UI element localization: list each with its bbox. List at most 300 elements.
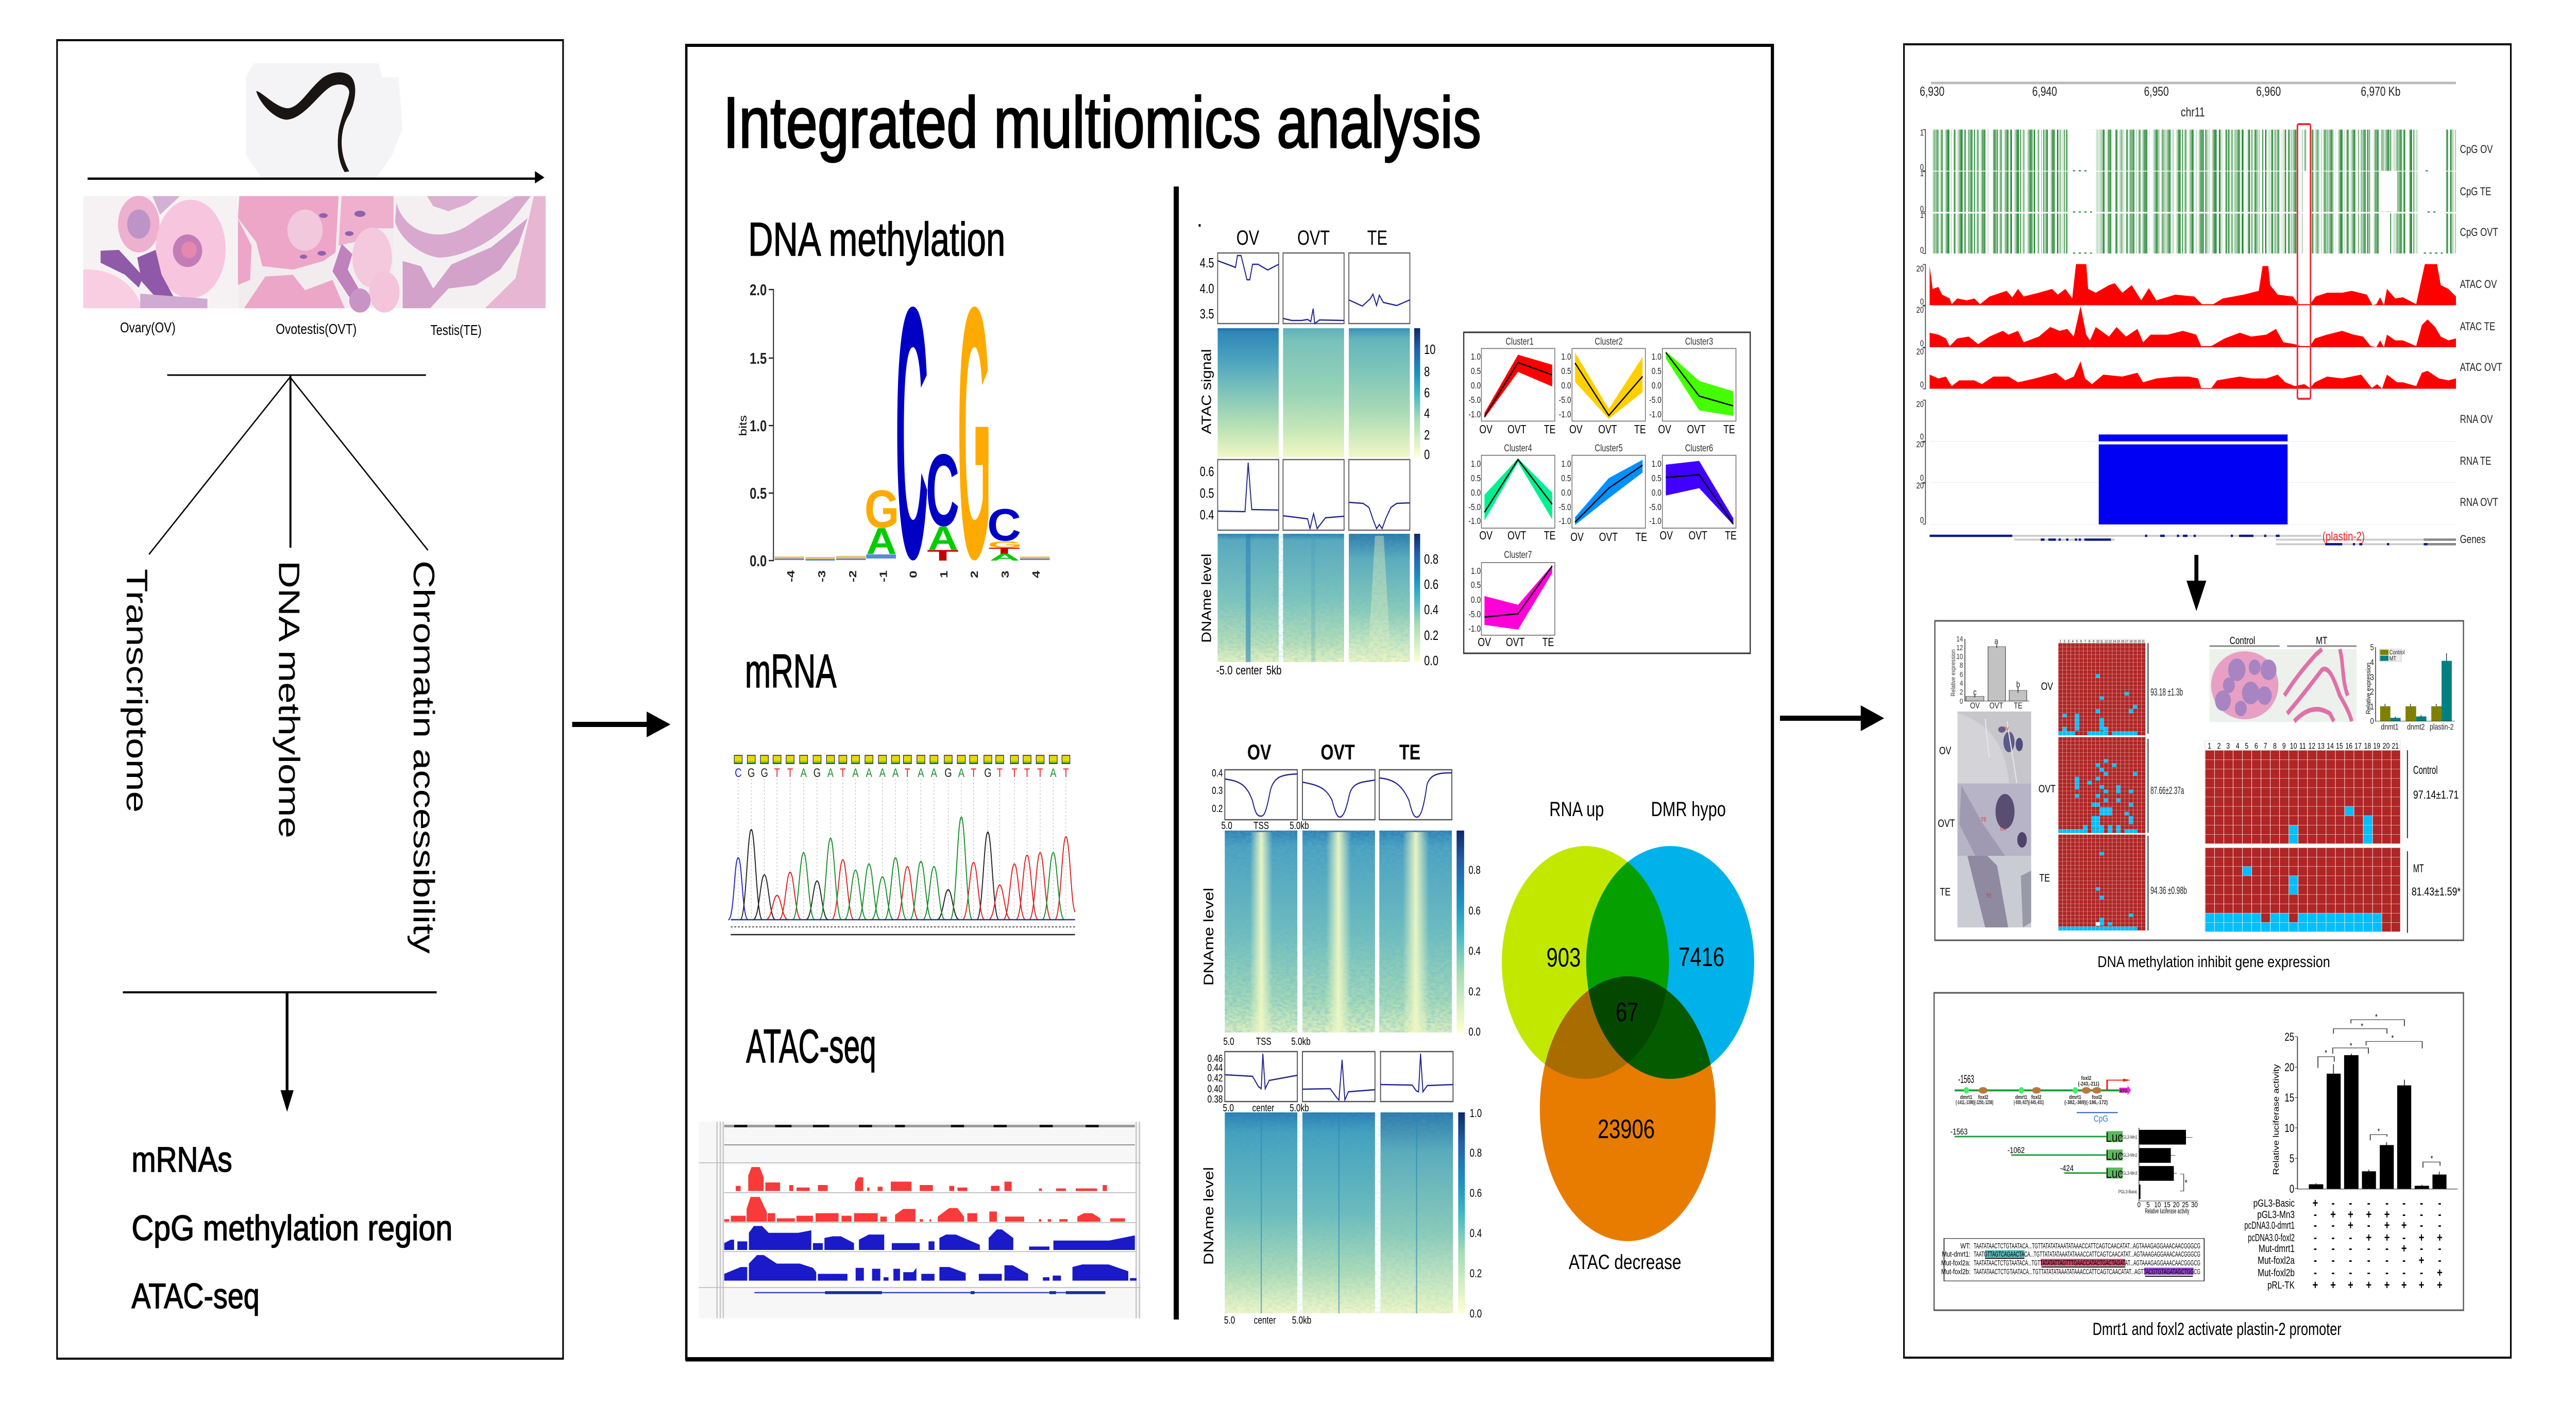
table: plasmid combinations: - xyxy=(2438,1242,2441,1256)
panel: expression clusters: 0.5 xyxy=(1561,366,1571,376)
track labels: ATAC TE xyxy=(2460,320,2495,333)
caption: DNA methylation inhibit gene expression: DNA methylation inhibit gene expression xyxy=(2097,953,2330,971)
panel: expression clusters: 0.0 xyxy=(1471,595,1481,605)
table: plasmid combinations: - xyxy=(2331,1242,2335,1256)
chart: relative luciferase activity bars: * xyxy=(2378,1127,2380,1136)
chart: TSS and center DNAme heatmaps: DNAme level xyxy=(1201,1167,1216,1265)
chart: relative expression bars: 0 xyxy=(1960,697,1963,705)
chart: sequence logo: -2 xyxy=(847,570,858,582)
panel: expression clusters: OV xyxy=(1570,531,1584,544)
chart: TSS and center DNAme heatmaps: 5.0 xyxy=(1223,1036,1234,1047)
block: promoter mutant sequences: Mut-foxl2a: xyxy=(1941,1259,1971,1267)
chart: sequencing chromatogram: A xyxy=(931,766,938,780)
table: plasmid combinations: - xyxy=(2367,1219,2370,1232)
chart: relative expression bars: 12 xyxy=(1956,644,1963,652)
chart: methylation grid control vs MT: 8 xyxy=(2273,742,2277,751)
table: plasmid combinations: + xyxy=(2330,1208,2336,1222)
chart: relative expression bars: 14 xyxy=(1956,635,1963,643)
panel: expression clusters: 0.5 xyxy=(1471,580,1481,590)
chart: TSS and center DNAme heatmaps: 0.46 xyxy=(1208,1053,1223,1064)
diagram: promoter schematic: (-382,-369) xyxy=(2064,1099,2086,1106)
chart: sequencing chromatogram: G xyxy=(984,766,992,780)
table: plasmid combinations: - xyxy=(2438,1219,2441,1232)
chart: bisulfite methylation grid by tissue: 8 xyxy=(2089,639,2090,644)
table: plasmid combinations: - xyxy=(2331,1254,2335,1267)
track labels xyxy=(2460,143,2502,546)
chart: TSS and center DNAme heatmaps: 0.2 xyxy=(1468,986,1481,999)
chart: methylation grid control vs MT: 17 xyxy=(2354,742,2362,751)
chart: TSS and center DNAme heatmaps: 0.40 xyxy=(1208,1083,1223,1094)
chart: genome browser tracks at plastin-2: 20 xyxy=(1917,439,1924,449)
chart: bisulfite methylation grid by tissue: 19 xyxy=(2133,639,2137,644)
chart: bisulfite methylation grid by tissue: 9 xyxy=(2093,639,2094,644)
chart: genome browser tracks at plastin-2: 20 xyxy=(1917,481,1924,490)
table: plasmid combinations: - xyxy=(2314,1254,2317,1267)
panel: integrated multiomics analysis xyxy=(686,44,1773,1361)
chart: gene expression control vs MT: 2 xyxy=(2370,687,2374,697)
chart: TSS and center DNAme heatmaps xyxy=(1201,740,1482,1326)
table: plasmid combinations: - xyxy=(2331,1266,2335,1280)
labels: tissue names: OV xyxy=(2041,680,2053,692)
chart: ATAC and DNAme heatmaps around center xyxy=(1199,226,1438,678)
chart: methylation grid control vs MT: 10 xyxy=(2290,742,2297,751)
panel: expression clusters: -1.0 xyxy=(1649,516,1662,526)
chart: relative luciferase activity bars: * xyxy=(2431,1155,2433,1163)
chart: TSS and center DNAme heatmaps: 5.0 xyxy=(1221,820,1232,831)
chart: genome browser tracks at plastin-2: 0 xyxy=(1920,339,1924,348)
panel: expression clusters: 0.0 xyxy=(1471,380,1481,391)
panel: expression clusters: 1.0 xyxy=(1652,351,1662,362)
chart: genome browser tracks at plastin-2 xyxy=(1917,83,2502,546)
panel: expression clusters: -5.0 xyxy=(1468,502,1481,512)
panel: expression clusters: Cluster1 xyxy=(1505,336,1534,347)
panel: expression clusters: 1.0 xyxy=(1561,351,1571,362)
chart: gene expression control vs MT: MT xyxy=(2389,655,2396,662)
table: plasmid combinations: - xyxy=(2402,1254,2405,1267)
diagram: promoter schematic: dmrt1 xyxy=(1960,1094,1973,1101)
chart: relative luciferase activity bars xyxy=(2244,1013,2458,1292)
chart: ATAC and DNAme heatmaps around center: ATAC signal xyxy=(1199,349,1214,434)
label: plastin-2: (plastin-2) xyxy=(2323,530,2365,544)
panel: expression clusters: OV xyxy=(1569,423,1583,436)
chart: sequencing chromatogram: A xyxy=(866,766,872,780)
panel: expression clusters: 0.0 xyxy=(1471,487,1481,498)
chart: methylation grid control vs MT: 9 xyxy=(2282,742,2286,751)
chart: sequencing chromatogram: C xyxy=(735,766,742,780)
panel: expression clusters: OV xyxy=(1479,529,1493,543)
image: in situ hybridization xyxy=(1957,712,2031,927)
chart: deletion constructs with luciferase activity: * xyxy=(2185,1178,2188,1188)
chart: deletion constructs with luciferase activity: 10 xyxy=(2154,1200,2161,1209)
image: gonad histology strip xyxy=(83,196,546,313)
chart: TSS and center DNAme heatmaps: 0.38 xyxy=(1208,1093,1223,1105)
chart: sequencing chromatogram: A xyxy=(879,766,886,780)
chart: Venn diagram: 7416 xyxy=(1679,942,1724,972)
chart: TSS and center DNAme heatmaps: 0.44 xyxy=(1208,1062,1223,1073)
panel: expression clusters: 0.0 xyxy=(1561,487,1571,498)
chart: ATAC and DNAme heatmaps around center: 0 xyxy=(1424,447,1430,462)
chart: methylation grid control vs MT: Control xyxy=(2413,764,2438,777)
chart: methylation grid control vs MT: 4 xyxy=(2236,742,2240,751)
chart: deletion constructs with luciferase activity: -424 xyxy=(2060,1163,2074,1173)
chart: methylation grid control vs MT: 16 xyxy=(2345,742,2352,751)
chart: sequence logo: 1 xyxy=(938,570,950,578)
chart: TSS and center DNAme heatmaps: center xyxy=(1254,1314,1276,1326)
table: plasmid combinations: - xyxy=(2314,1242,2317,1256)
chart: sequencing chromatogram: G xyxy=(814,766,821,780)
table: plasmid combinations: - xyxy=(2438,1208,2441,1222)
diagram: promoter schematic: (-1411,-1398)(-1250,-1236) xyxy=(1956,1099,1993,1106)
panel: expression clusters: TE xyxy=(1543,636,1554,649)
table: plasmid combinations: + xyxy=(2366,1278,2371,1292)
panel: expression clusters: TE xyxy=(1544,423,1555,436)
image: control vs MT histology: MT xyxy=(2316,635,2327,646)
diagram: promoter schematic: -1563 xyxy=(1958,1073,1974,1086)
image: control vs MT histology xyxy=(2210,635,2357,722)
chart: TSS and center DNAme heatmaps: 5.0 xyxy=(1224,1314,1235,1326)
dot mark xyxy=(1199,224,1200,227)
chart: genome browser tracks at plastin-2: 0 xyxy=(1920,515,1924,525)
labels: tissue names: OVT xyxy=(2039,783,2056,794)
chart: TSS and center DNAme heatmaps: 0.8 xyxy=(1468,864,1481,877)
chart: genome browser tracks at plastin-2: 6,960 xyxy=(2256,84,2281,99)
panel: expression clusters: 1.0 xyxy=(1471,459,1481,469)
chart: relative expression bars: b xyxy=(2016,680,2020,689)
table: plasmid combinations: pcDNA3.0-foxl2 xyxy=(2248,1232,2295,1243)
table: plasmid combinations: Mut-foxl2a xyxy=(2258,1255,2295,1266)
panel: expression clusters: -5.0 xyxy=(1559,395,1571,405)
table: plasmid combinations: - xyxy=(2349,1196,2352,1210)
chart: ATAC and DNAme heatmaps around center: 2 xyxy=(1424,427,1430,443)
chart: sequencing chromatogram: G xyxy=(760,766,768,780)
image: in situ hybridization: OV xyxy=(2003,726,2009,732)
diagram: promoter schematic: foxl2 xyxy=(2081,1075,2092,1081)
table: plasmid combinations: + xyxy=(2401,1278,2407,1292)
table: plasmid combinations: + xyxy=(2313,1196,2318,1210)
table: plasmid combinations: + xyxy=(2384,1278,2390,1292)
table: plasmid combinations: - xyxy=(2367,1196,2370,1210)
track labels: ATAC OV xyxy=(2460,278,2497,291)
chart: gene expression control vs MT: Relative expression xyxy=(2365,663,2372,714)
chart: sequencing chromatogram: A xyxy=(801,766,807,780)
chart: bisulfite methylation grid by tissue: 2 xyxy=(2064,639,2065,644)
chart: methylation grid control vs MT: 81.43±1.59* xyxy=(2412,886,2461,899)
chart: deletion constructs with luciferase activity: PGL3-Mn2 xyxy=(2120,1153,2138,1158)
chart: bisulfite methylation grid by tissue: 11 xyxy=(2100,639,2104,644)
chart: ATAC and DNAme heatmaps around center: 0.8 xyxy=(1424,551,1438,567)
chart: TSS and center DNAme heatmaps: 5.0kb xyxy=(1291,1036,1311,1047)
panel: expression clusters: -5.0 xyxy=(1649,395,1662,405)
chart: methylation grid control vs MT: 18 xyxy=(2364,742,2371,751)
chart: TSS and center DNAme heatmaps: center xyxy=(1252,1102,1274,1113)
chart: ATAC and DNAme heatmaps around center: 4.0 xyxy=(1200,281,1214,296)
chart: sequence logo: -4 xyxy=(785,570,796,582)
chart: ATAC and DNAme heatmaps around center: 0.0 xyxy=(1424,653,1438,668)
panel: expression clusters: TE xyxy=(1635,531,1647,544)
panel: expression clusters: OV xyxy=(1479,423,1493,436)
chart: relative luciferase activity bars: * xyxy=(2325,1049,2327,1058)
list: outputs: mRNAs xyxy=(131,1140,232,1180)
chart: genome browser tracks at plastin-2: 6,950 xyxy=(2144,84,2169,99)
table: plasmid combinations: - xyxy=(2420,1266,2423,1280)
diagram: promoter schematic: foxl2 xyxy=(2092,1094,2102,1101)
chart: sequencing chromatogram: A xyxy=(1050,766,1057,780)
image: in situ hybridization: TE xyxy=(1986,893,1992,899)
chart: bisulfite methylation grid by tissue: 3 xyxy=(2068,639,2070,644)
chart: sequence logo: A xyxy=(928,519,958,557)
chart: sequencing chromatogram: T xyxy=(840,766,846,780)
chart: bisulfite methylation grid by tissue: 16 xyxy=(2121,639,2125,644)
chart: bisulfite methylation grid by tissue: 10 xyxy=(2096,639,2099,644)
chart: TSS and center DNAme heatmaps: 0.42 xyxy=(1208,1072,1223,1084)
diagram: promoter schematic: dmrt1 xyxy=(2069,1094,2081,1101)
panel: Dmrt1 and foxl2 activate plastin-2 promoter xyxy=(1934,993,2464,1310)
chart: ATAC and DNAme heatmaps around center: OV xyxy=(1236,226,1259,249)
panel: expression clusters: 0.0 xyxy=(1652,380,1662,391)
chart: Venn diagram: 903 xyxy=(1547,942,1581,972)
chart: genome browser tracks at plastin-2: chr11 xyxy=(2181,105,2205,120)
block: promoter mutant sequences: TAATATAACTCTGTAATACA...TGTTATATATTAGTTTGAACCATACTGACTAGATAT...AGTAAAGAGGAAACAACGGGCG xyxy=(1974,1259,2200,1267)
table: plasmid combinations: - xyxy=(2314,1219,2317,1232)
chart: genome browser tracks at plastin-2: 0 xyxy=(1920,297,1924,307)
chart: relative expression bars: 10 xyxy=(1956,652,1963,661)
chart: genome browser tracks at plastin-2: 20 xyxy=(1917,305,1924,315)
panel: expression clusters: -5.0 xyxy=(1649,502,1662,512)
panel: expression clusters: TE xyxy=(1634,423,1646,436)
chart: Venn diagram: ATAC decrease xyxy=(1569,1250,1681,1274)
panel: expression clusters: Cluster7 xyxy=(1504,549,1532,560)
table: plasmid combinations: - xyxy=(2385,1196,2388,1210)
chart: ATAC and DNAme heatmaps around center: 10 xyxy=(1424,342,1435,357)
chart: ATAC and DNAme heatmaps around center: DNAme level xyxy=(1199,553,1214,643)
table: plasmid combinations: + xyxy=(2384,1231,2390,1245)
table: plasmid combinations: + xyxy=(2348,1208,2353,1222)
chart: sequence logo: 1.0 xyxy=(750,417,767,435)
panel: expression clusters: 0.5 xyxy=(1652,366,1662,376)
chart: genome browser tracks at plastin-2: 1 xyxy=(1920,168,1924,178)
chart: TSS and center DNAme heatmaps: 5.0kb xyxy=(1290,1102,1309,1113)
chart: sequence logo: C xyxy=(895,233,928,634)
table: plasmid combinations: - xyxy=(2367,1242,2370,1256)
labels: tissue names xyxy=(1938,680,2056,898)
panel: expression clusters: -1.0 xyxy=(1468,516,1481,526)
chart: sequencing chromatogram: A xyxy=(958,766,965,780)
table: plasmid combinations: - xyxy=(2438,1196,2441,1210)
panel: expression clusters: -1.0 xyxy=(1649,409,1662,419)
chart: deletion constructs with luciferase activity: 25 xyxy=(2182,1200,2189,1209)
chart: gene expression control vs MT: 3 xyxy=(2370,672,2374,682)
panel: expression clusters: 0.5 xyxy=(1561,473,1571,483)
chart: relative expression bars: 6 xyxy=(1960,670,1963,679)
chart: bisulfite methylation grid by tissue: 5 xyxy=(2076,639,2078,644)
chart: gene expression control vs MT: 5 xyxy=(2370,642,2374,652)
chart: TSS and center DNAme heatmaps: 0.6 xyxy=(1470,1187,1482,1200)
chart: ATAC and DNAme heatmaps around center: 4.5 xyxy=(1200,255,1214,270)
chart: Venn diagram: 67 xyxy=(1616,997,1638,1027)
chart: relative luciferase activity bars: Relative luciferase activity xyxy=(2272,1064,2281,1175)
panel: expression clusters: 1.0 xyxy=(1561,459,1571,469)
chart: deletion constructs with luciferase activity: 15 xyxy=(2164,1200,2171,1209)
chart: sequence logo: G xyxy=(958,233,991,634)
chart: methylation grid control vs MT: 19 xyxy=(2373,742,2380,751)
chart: bisulfite methylation grid by tissue: 14 xyxy=(2113,639,2116,644)
chart: relative luciferase activity bars: 0 xyxy=(2290,1183,2294,1196)
chart: deletion constructs with luciferase activity: Luc xyxy=(2106,1165,2123,1181)
chart: methylation grid control vs MT xyxy=(2205,740,2461,933)
chart: ATAC and DNAme heatmaps around center: 0.4 xyxy=(1200,507,1214,522)
chart: genome browser tracks at plastin-2: 0 xyxy=(1920,432,1924,442)
chart: sequence logo: -1 xyxy=(877,570,889,582)
track labels: CpG OVT xyxy=(2460,226,2498,239)
chart: ATAC and DNAme heatmaps around center: 4 xyxy=(1424,405,1430,421)
chart: genome browser tracks at plastin-2: 0 xyxy=(1920,380,1924,390)
chart: methylation grid control vs MT: 11 xyxy=(2299,742,2306,751)
table: plasmid combinations: + xyxy=(2401,1242,2407,1256)
labels: tissue names: OV xyxy=(1939,745,1952,756)
chart: sequencing chromatogram: T xyxy=(1063,766,1069,780)
chart: deletion constructs with luciferase activity: -1563 xyxy=(1951,1127,1968,1137)
table: plasmid combinations: + xyxy=(2366,1208,2371,1222)
table: plasmid combinations: + xyxy=(2437,1278,2443,1292)
chart: ATAC and DNAme heatmaps around center: 0.6 xyxy=(1424,577,1438,592)
track labels: RNA OV xyxy=(2460,413,2493,426)
table: plasmid combinations: - xyxy=(2314,1266,2317,1280)
chart: TSS and center DNAme heatmaps: 5.0kb xyxy=(1290,820,1309,831)
track labels: RNA OVT xyxy=(2460,496,2498,509)
chart: sequencing chromatogram: G xyxy=(944,766,952,780)
chart: genome browser tracks at plastin-2: 0 xyxy=(1920,473,1924,483)
chart: relative expression bars: 2 xyxy=(1960,688,1963,696)
chart: relative expression bars: Relative expression xyxy=(1950,649,1956,697)
panel: expression clusters: OVT xyxy=(1599,531,1618,544)
image: in situ hybridization: OV xyxy=(2000,826,2007,832)
block: promoter mutant sequences: TAATGTTAGTCAGAACTACA...TGTTATATATAAATATAAACCATTCAGTCAACATAT...AGTAAAGAGGAAACAACGGGCG xyxy=(1974,1250,2200,1258)
list: outputs xyxy=(131,1140,452,1316)
chart: relative expression bars: c xyxy=(1973,687,1977,697)
CpG methylation tracks xyxy=(1929,129,2456,255)
chart: bisulfite methylation grid by tissue: 18 xyxy=(2129,639,2133,644)
diagram: promoter schematic xyxy=(1955,1073,2131,1124)
diagram: promoter schematic: dmrt1 xyxy=(2015,1094,2027,1101)
chart: bisulfite methylation grid by tissue: 94.36 ±0.98b xyxy=(2150,885,2187,896)
chart: sequence logo: 1.5 xyxy=(750,349,767,367)
chart: bisulfite methylation grid by tissue xyxy=(2058,638,2187,931)
table: plasmid combinations: - xyxy=(2314,1231,2317,1245)
chart: relative luciferase activity bars: 5 xyxy=(2290,1153,2294,1165)
chart: methylation grid control vs MT: MT xyxy=(2413,862,2424,875)
chart: sequence logo: C xyxy=(926,433,959,548)
panel: expression clusters: -5.0 xyxy=(1468,609,1481,619)
table: plasmid combinations: pRL-TK xyxy=(2267,1279,2295,1291)
chart: methylation grid control vs MT: 14 xyxy=(2327,742,2334,751)
chart: sequencing chromatogram: T xyxy=(1011,766,1018,780)
labels: tissue names: TE xyxy=(1940,886,1951,898)
block: promoter mutant sequences: TAATATAACTCTGTAATACA...TGTTATATATAAATATAAACCATTCAGTCAACATAT...AGTAAAGAGGAAACAACGGGCG xyxy=(1974,1242,2200,1250)
table: plasmid combinations: + xyxy=(2384,1219,2390,1232)
chart: sequencing chromatogram: A xyxy=(892,766,899,780)
chart: genome browser tracks at plastin-2: 0 xyxy=(1920,204,1924,214)
chart: gene expression control vs MT: 4 xyxy=(2370,657,2374,667)
chart: gene expression control vs MT: Control xyxy=(2389,649,2404,656)
chart: sequence logo xyxy=(737,233,1049,634)
chart: bisulfite methylation grid by tissue: 12 xyxy=(2105,639,2108,644)
chart: ATAC and DNAme heatmaps around center: center xyxy=(1236,664,1262,678)
chart: methylation grid control vs MT: 12 xyxy=(2309,742,2315,751)
table: plasmid combinations: - xyxy=(2331,1196,2335,1210)
chart: methylation grid control vs MT: 3 xyxy=(2226,742,2230,751)
chart: bisulfite methylation grid by tissue: 4 xyxy=(2072,639,2074,644)
chart: bisulfite methylation grid by tissue: 1 xyxy=(2060,639,2061,644)
chart: TSS and center DNAme heatmaps: 5.0 xyxy=(1223,1102,1234,1113)
panel: expression clusters: OV xyxy=(1478,636,1491,649)
panel: expression clusters: TE xyxy=(1544,529,1555,543)
label: Testis: Testis(TE) xyxy=(431,322,482,339)
panel: expression clusters: 0.5 xyxy=(1652,473,1662,483)
panel: expression clusters: -5.0 xyxy=(1559,502,1571,512)
chart: deletion constructs with luciferase activity: 30 xyxy=(2191,1200,2198,1209)
chart: bisulfite methylation grid by tissue: 87.66±2.37a xyxy=(2150,785,2184,796)
panel: expression clusters: -5.0 xyxy=(1468,395,1481,405)
chart: deletion constructs with luciferase activity: PGL3-Mn3 xyxy=(2120,1171,2138,1176)
arrow: genome view to validation xyxy=(2187,555,2206,611)
chart: TSS and center DNAme heatmaps: 0.4 xyxy=(1468,945,1481,958)
chart: TSS and center DNAme heatmaps: 5.0kb xyxy=(1292,1314,1311,1326)
panel: expression clusters: OVT xyxy=(1507,423,1527,436)
diagram: promoter schematic: foxl2 xyxy=(1978,1094,1989,1101)
chart: TSS and center DNAme heatmaps: OVT xyxy=(1320,740,1355,764)
branching lines to omics layers xyxy=(149,375,428,554)
table: plasmid combinations: + xyxy=(2437,1266,2443,1280)
table: plasmid combinations: + xyxy=(2437,1231,2443,1245)
chart: sequencing chromatogram: T xyxy=(1037,766,1043,780)
panel: expression clusters: Cluster3 xyxy=(1685,336,1713,347)
table: plasmid combinations: - xyxy=(2420,1219,2423,1232)
table: plasmid combinations: - xyxy=(2402,1266,2405,1280)
chart: ATAC and DNAme heatmaps around center: -5.0 xyxy=(1216,664,1233,678)
chart: relative luciferase activity bars: * xyxy=(2361,1022,2363,1031)
chart: bisulfite methylation grid by tissue: 21 xyxy=(2142,639,2145,644)
chart: gene expression control vs MT: 1 xyxy=(2370,702,2374,712)
diagram: promoter schematic: ATG xyxy=(2120,1088,2128,1094)
chart: ATAC and DNAme heatmaps around center: OVT xyxy=(1297,226,1330,249)
chart: sequencing chromatogram: A xyxy=(918,766,924,780)
chart: genome browser tracks at plastin-2: 1 xyxy=(1920,128,1924,138)
chart: bisulfite methylation grid by tissue: 15 xyxy=(2117,639,2120,644)
table: plasmid combinations: Mut-dmrt1 xyxy=(2259,1243,2295,1254)
icon: eel photo backdrop xyxy=(246,63,402,178)
panel: expression clusters: Cluster5 xyxy=(1595,443,1623,453)
divider and arrow to outputs xyxy=(123,991,437,993)
chart: deletion constructs with luciferase activity: Luc xyxy=(2106,1147,2123,1163)
arrow: development timeline xyxy=(88,171,545,183)
panel: expression clusters: OVT xyxy=(1687,423,1706,436)
panel: expression clusters: 0.5 xyxy=(1471,366,1481,376)
chart: ATAC and DNAme heatmaps around center: 0.4 xyxy=(1424,602,1438,617)
chart: deletion constructs with luciferase activity: 0 xyxy=(2137,1200,2141,1209)
chart: methylation grid control vs MT: 15 xyxy=(2336,742,2343,751)
block: promoter mutant sequences: Mut-dmrt1: xyxy=(1942,1250,1971,1258)
chart: sequence logo: 0.5 xyxy=(750,484,767,502)
chart: sequence logo: G xyxy=(988,540,1023,550)
table: plasmid combinations: + xyxy=(2419,1254,2424,1267)
table: plasmid combinations: + xyxy=(2401,1219,2407,1232)
table: plasmid combinations: + xyxy=(2313,1278,2318,1292)
arrow: panel 2 to panel 3 xyxy=(1780,705,1884,731)
chart: bisulfite methylation grid by tissue: 6 xyxy=(2080,639,2082,644)
chart: ATAC and DNAme heatmaps around center: 5kb xyxy=(1266,664,1282,678)
chart: sequencing chromatogram: T xyxy=(971,766,976,780)
chart: ATAC and DNAme heatmaps around center: TE xyxy=(1367,226,1387,249)
